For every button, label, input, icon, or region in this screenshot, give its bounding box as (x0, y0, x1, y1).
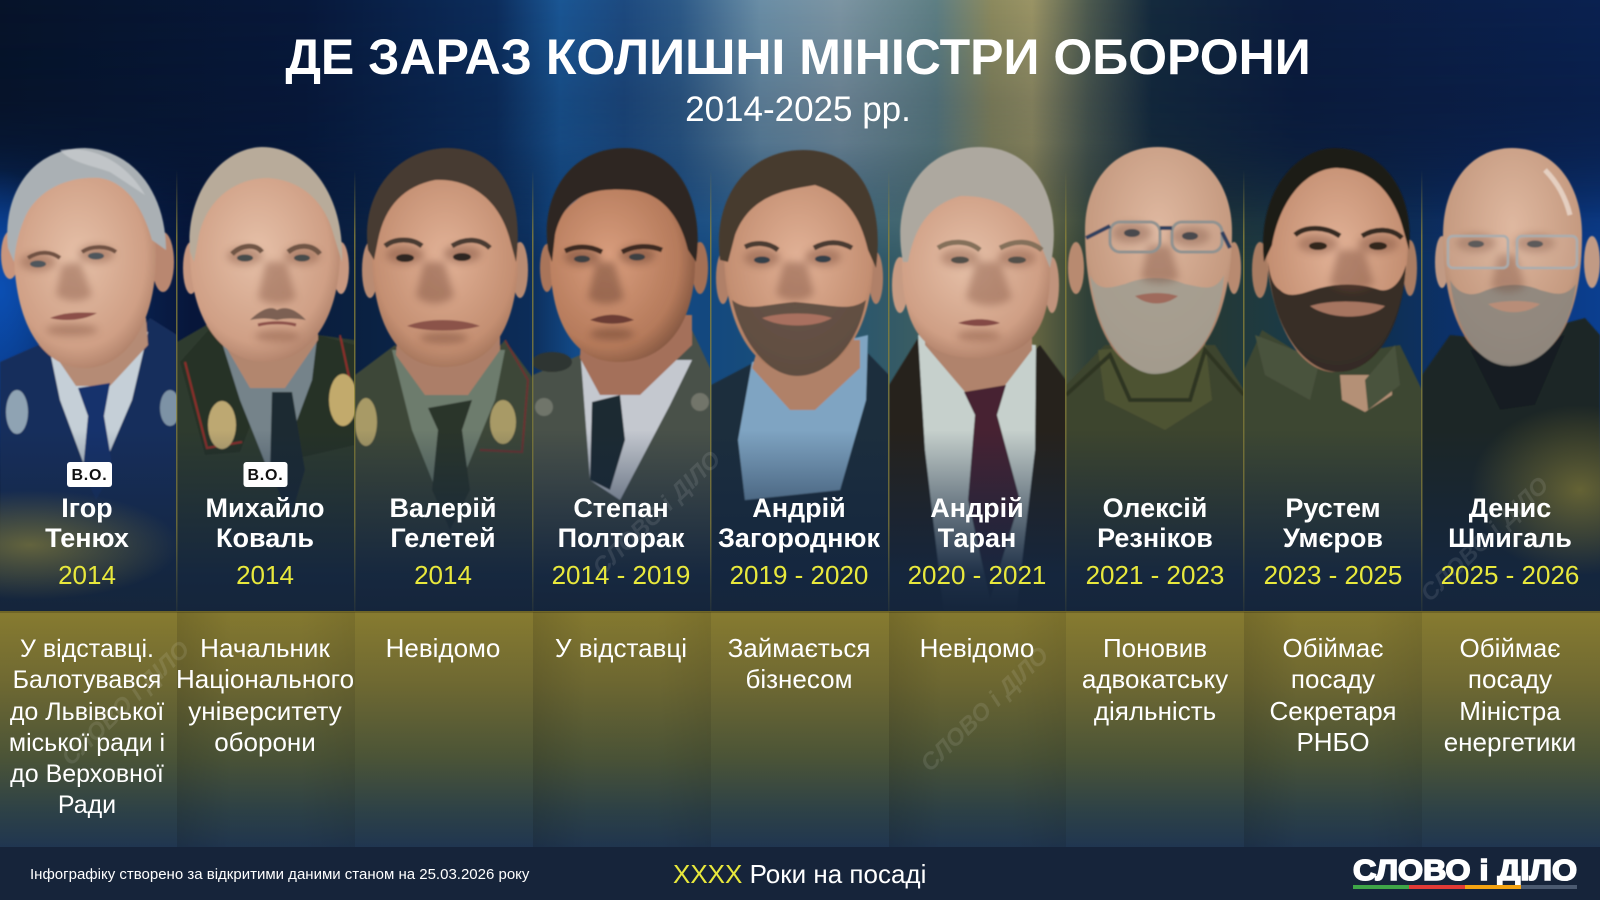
years: 2014 (414, 560, 472, 590)
acting badge (244, 462, 288, 487)
status: Обіймає (1282, 633, 1384, 663)
name: Денис (1469, 493, 1551, 523)
status: У відставці (555, 633, 687, 663)
watermarks: СЛОВО і ДІЛО (1415, 472, 1555, 607)
watermarks: СЛОВО і ДІЛО (587, 446, 727, 581)
portrait: Олексій Резніков (1066, 146, 1244, 560)
portrait: Андрій Таран (889, 147, 1066, 620)
status: до Львівської (10, 698, 164, 726)
subtitle: 2014-2025 рр. (685, 90, 911, 129)
column dividers (176, 170, 1422, 612)
status: Національного (176, 664, 354, 694)
years: 2014 (58, 560, 116, 590)
status: посаду (1468, 664, 1552, 694)
name: Андрій (752, 493, 846, 523)
status: У відставці. (20, 635, 154, 663)
portrait: Рустем Умєров (1244, 147, 1422, 560)
name: Загороднюк (718, 523, 880, 553)
watermarks: СЛОВО і ДІЛО (56, 636, 196, 771)
column: Олексій Резніков (1082, 493, 1228, 726)
acting badge: В.О. (71, 467, 108, 484)
status: бізнесом (745, 664, 853, 694)
status: Невідомо (920, 633, 1034, 663)
status: Ради (58, 791, 116, 819)
portrait: Денис Шмигаль (1422, 147, 1600, 522)
portrait: Михайло Коваль (178, 146, 355, 550)
years: 2014 (236, 560, 294, 590)
logo: СЛОВО і ДІЛО (1353, 855, 1577, 887)
watermarks: СЛОВО і ДІЛО (915, 642, 1055, 777)
source note: Інфографіку створено за відкритими даними станом на 25.03.2026 року (30, 866, 530, 883)
status: посаду (1291, 664, 1375, 694)
status: енергетики (1444, 727, 1576, 757)
column: Рустем Умєров (1264, 493, 1402, 757)
title: ДЕ ЗАРАЗ КОЛИШНІ МІНІСТРИ ОБОРОНИ (285, 29, 1311, 85)
portrait: Андрій Загороднюк (711, 149, 888, 530)
legend: XXXX Роки на посаді (673, 859, 926, 889)
status: діяльність (1094, 696, 1216, 726)
portrait: Ігор Тенюх (0, 147, 177, 554)
status: Секретаря (1270, 696, 1396, 726)
column: Денис Шмигаль (1441, 493, 1579, 757)
status: Займається (728, 633, 870, 663)
years: 2021 - 2023 (1086, 560, 1224, 590)
status: Міністра (1459, 696, 1561, 726)
status: оборони (214, 727, 316, 757)
column: Степан Полторак (552, 493, 690, 663)
portraits row (0, 147, 1600, 620)
name: Андрій (930, 493, 1024, 523)
name: Резніков (1097, 523, 1213, 553)
name: Гелетей (390, 523, 496, 553)
name: Олексій (1103, 493, 1207, 523)
status: до Верховної (10, 760, 164, 788)
status: Начальник (200, 633, 330, 663)
watermarks (56, 446, 1555, 777)
name: Степан (573, 493, 669, 523)
status: адвокатську (1082, 664, 1228, 694)
column: Андрій Таран (908, 493, 1046, 663)
column: Ігор Тенюх (9, 462, 165, 819)
status band (0, 611, 1600, 847)
name: Ігор (61, 493, 113, 523)
name: Таран (938, 523, 1016, 553)
acting badge (67, 462, 112, 487)
column: Андрій Загороднюк (718, 493, 880, 694)
column: Валерій Гелетей (386, 493, 500, 663)
acting badge: В.О. (247, 467, 284, 484)
years: 2019 - 2020 (730, 560, 868, 590)
background (0, 0, 1600, 463)
status: Поновив (1103, 633, 1207, 663)
name: Умєров (1283, 523, 1383, 553)
years: 2020 - 2021 (908, 560, 1046, 590)
years: 2025 - 2026 (1441, 560, 1579, 590)
status: РНБО (1296, 727, 1370, 757)
name: Коваль (216, 523, 314, 553)
portrait: Степан Полторак (533, 147, 711, 564)
status: Невідомо (386, 633, 500, 663)
status: Балотувався (13, 666, 161, 694)
portrait: Валерій Гелетей (355, 148, 533, 560)
column fade overlays (0, 405, 1600, 612)
column: Михайло Коваль (176, 462, 354, 757)
status: Обіймає (1459, 633, 1561, 663)
status: міської ради і (9, 729, 165, 757)
footer bar (0, 847, 1600, 900)
name: Рустем (1285, 493, 1381, 523)
name: Шмигаль (1448, 523, 1572, 553)
name: Михайло (205, 493, 325, 523)
years: 2014 - 2019 (552, 560, 690, 590)
name: Тенюх (45, 523, 129, 553)
years: 2023 - 2025 (1264, 560, 1402, 590)
name: Полторак (558, 523, 685, 553)
status: університету (188, 696, 342, 726)
name: Валерій (390, 493, 496, 523)
